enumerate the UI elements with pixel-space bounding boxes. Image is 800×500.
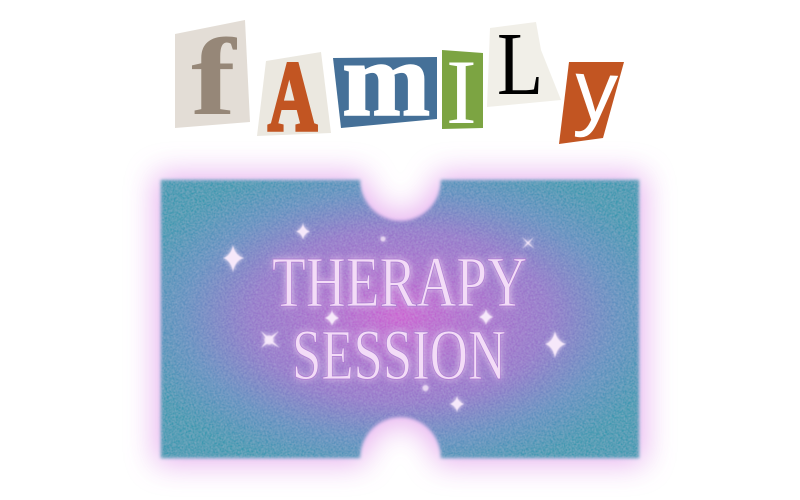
sparkle cross top right xyxy=(522,237,535,249)
letter tile: L xyxy=(487,14,561,113)
dot bottom xyxy=(422,385,428,391)
letter tile: I: I xyxy=(446,41,477,143)
letter tile: f: f xyxy=(191,16,238,138)
letter tile: A xyxy=(257,42,331,152)
heading: therapy session xyxy=(272,242,527,395)
sparkle bottom xyxy=(450,396,464,412)
dot top xyxy=(380,236,386,242)
heading line: THERAPY: THERAPY xyxy=(272,242,527,322)
letter tile: L: L xyxy=(497,14,543,113)
letter tile: f xyxy=(175,16,250,138)
ticket glow xyxy=(161,180,639,458)
sparkle bright core left xyxy=(264,336,274,344)
sparkle cross left xyxy=(261,331,280,348)
sparkle mid right xyxy=(479,309,493,325)
sparkles xyxy=(223,223,566,412)
sparkle mid left xyxy=(325,310,339,326)
sparkle large left xyxy=(223,245,244,272)
heading line: SESSION: SESSION xyxy=(292,315,506,395)
letter tile: A: A xyxy=(268,42,317,152)
letter tile: y: y xyxy=(572,42,620,140)
sparkle large right xyxy=(545,331,566,358)
sparkle top xyxy=(296,223,310,240)
letter tile: m: m xyxy=(342,21,430,138)
panel: ticket xyxy=(161,180,639,458)
title: family ransom-note letters xyxy=(175,14,624,152)
